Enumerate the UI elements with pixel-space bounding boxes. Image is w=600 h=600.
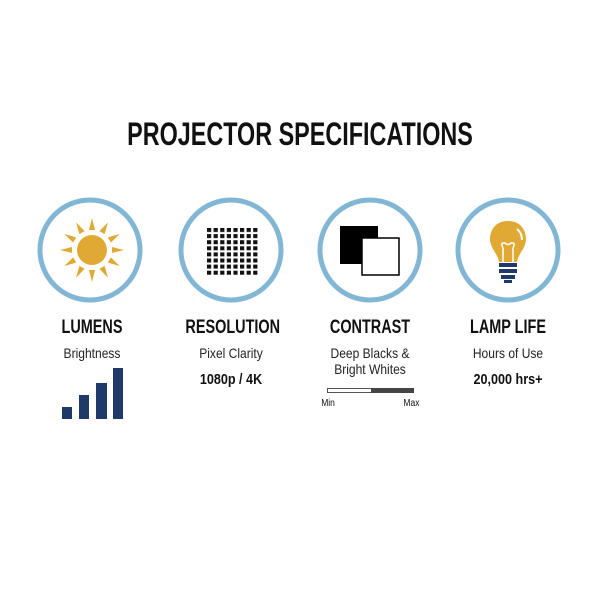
icon: light bulb — [458, 200, 558, 300]
text: contrast scale labels: Min — [321, 398, 335, 409]
text: contrast: Bright Whites — [334, 361, 406, 377]
text: lamp life — [470, 317, 546, 388]
text: lamp life: Hours of Use — [473, 345, 543, 361]
text: resolution — [185, 317, 280, 388]
text: lamp life: 20,000 hrs+ — [473, 371, 543, 388]
text: contrast: Deep Blacks & — [331, 345, 409, 361]
text: resolution: Pixel Clarity — [199, 345, 263, 361]
text: contrast — [330, 317, 410, 377]
text: resolution: 1080p / 4K — [200, 371, 262, 388]
text: lumens — [62, 317, 122, 361]
contrast slider — [328, 388, 414, 393]
icon: contrast squares — [320, 200, 420, 300]
text: contrast: CONTRAST — [330, 317, 410, 338]
text: lamp life: LAMP LIFE — [470, 317, 546, 338]
text: lumens: Brightness — [64, 345, 120, 361]
chart: lumens bars — [62, 368, 123, 419]
icon: sun — [40, 200, 140, 300]
text: resolution: RESOLUTION — [185, 317, 280, 338]
text: lumens: LUMENS — [62, 317, 122, 338]
text: max label: Max — [403, 398, 419, 409]
title: PROJECTOR SPECIFICATIONS — [127, 116, 473, 152]
icon: pixel grid — [181, 200, 281, 300]
